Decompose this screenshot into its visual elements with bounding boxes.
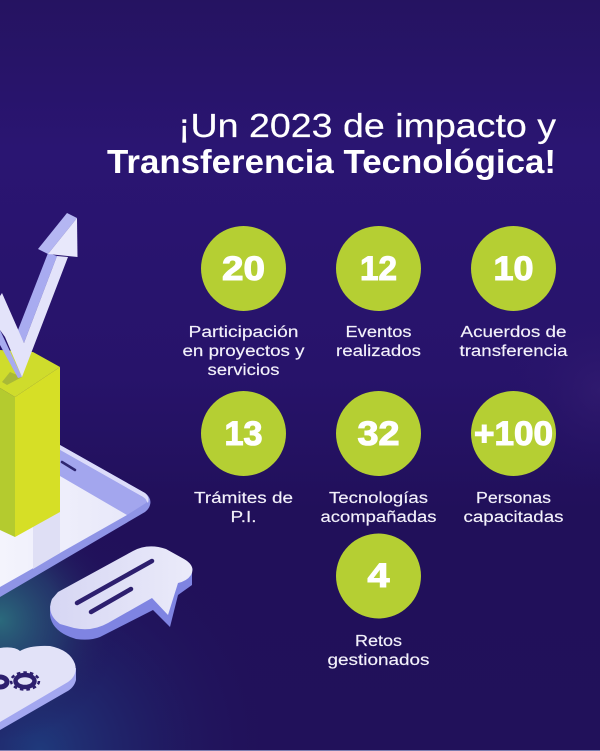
stat: 20: Participación <box>188 324 298 341</box>
title: ¡Un 2023 de impacto y <box>178 107 557 144</box>
stat: 32: acompañadas <box>320 509 437 526</box>
stat: 4: gestionados <box>328 652 430 669</box>
arrow <box>0 213 78 378</box>
stat: +100 <box>464 391 564 526</box>
stat: 13: 13 <box>224 415 262 453</box>
stat: +100: capacitadas <box>464 509 564 526</box>
stat: 13: P.I. <box>230 509 256 526</box>
stat: 10: 10 <box>494 250 534 288</box>
stat: 32: Tecnologías <box>329 490 428 507</box>
stat: 10 <box>460 226 568 360</box>
tablet <box>0 445 150 597</box>
stat: 10: transferencia <box>460 343 568 360</box>
icon: cloud with gears <box>0 646 76 730</box>
stat: +100: +100 <box>474 415 553 453</box>
stat: 10: Acuerdos de <box>460 324 566 341</box>
stat: 20 <box>182 226 305 379</box>
icon: gears <box>0 672 39 690</box>
stat: 12: realizados <box>336 343 421 360</box>
green bar <box>0 350 60 537</box>
stat: 12: Eventos <box>346 324 412 341</box>
title: Transferencia Tecnológica! <box>107 143 556 180</box>
stat: 20: servicios <box>208 362 280 379</box>
title <box>107 107 557 180</box>
stat: 4 <box>328 534 430 669</box>
stat: 13: Trámites de <box>194 490 293 507</box>
stat: 12: 12 <box>360 250 397 288</box>
illustration: tablet, bar and arrow <box>0 213 150 597</box>
stat: 12 <box>336 226 421 360</box>
stat: 32 <box>320 391 437 526</box>
stat: 20: 20 <box>222 250 265 288</box>
stat: 4: 4 <box>368 557 390 595</box>
stat: +100: Personas <box>476 490 551 507</box>
stat: 13 <box>194 391 293 526</box>
stat: 20: en proyectos y <box>182 343 305 360</box>
stat: 4: Retos <box>355 633 402 650</box>
icon: speech bubble <box>50 546 192 640</box>
stat: 32: 32 <box>358 415 400 453</box>
